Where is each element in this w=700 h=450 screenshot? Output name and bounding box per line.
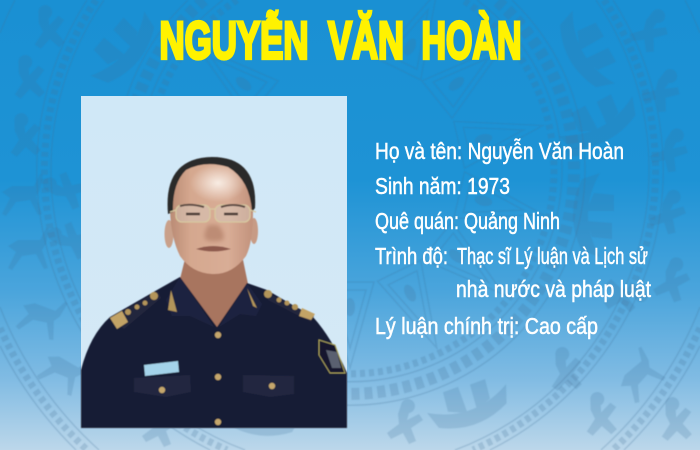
eyes and brows: [180, 205, 245, 207]
mouth: [196, 246, 231, 252]
full name: Họ và tên: Nguyễn Văn Hoàn: [375, 138, 624, 164]
hometown: Quê quán: Quảng Ninh: [375, 208, 560, 234]
pockets: [134, 375, 294, 397]
collar insignia: [168, 288, 257, 312]
photo panel: [81, 96, 347, 428]
education label: Trình độ:: [375, 243, 448, 269]
hair: [168, 157, 255, 214]
shoulder badge: [319, 340, 345, 373]
ear left: [164, 220, 174, 248]
political theory: Lý luận chính trị: Cao cấp: [375, 313, 598, 339]
portrait: [81, 157, 347, 428]
education line 2: nhà nước và pháp luật: [456, 276, 652, 302]
title: VĂN: [328, 10, 404, 70]
biography text: [375, 138, 652, 339]
birth year: Sinh năm: 1973: [375, 173, 510, 199]
forehead highlight: [190, 164, 246, 202]
neck: [180, 255, 248, 329]
glasses: [170, 205, 256, 222]
head: [170, 160, 253, 274]
epaulette right: [264, 291, 314, 322]
name tag: [144, 361, 179, 376]
title: [160, 10, 522, 70]
ear right: [250, 218, 258, 244]
buttons: [215, 332, 221, 338]
title: HOÀN: [422, 10, 522, 70]
uniform: [81, 277, 347, 428]
collar: [166, 277, 262, 327]
title: NGUYỄN: [160, 10, 308, 70]
epaulette left: [110, 291, 161, 329]
nose: [204, 225, 224, 242]
